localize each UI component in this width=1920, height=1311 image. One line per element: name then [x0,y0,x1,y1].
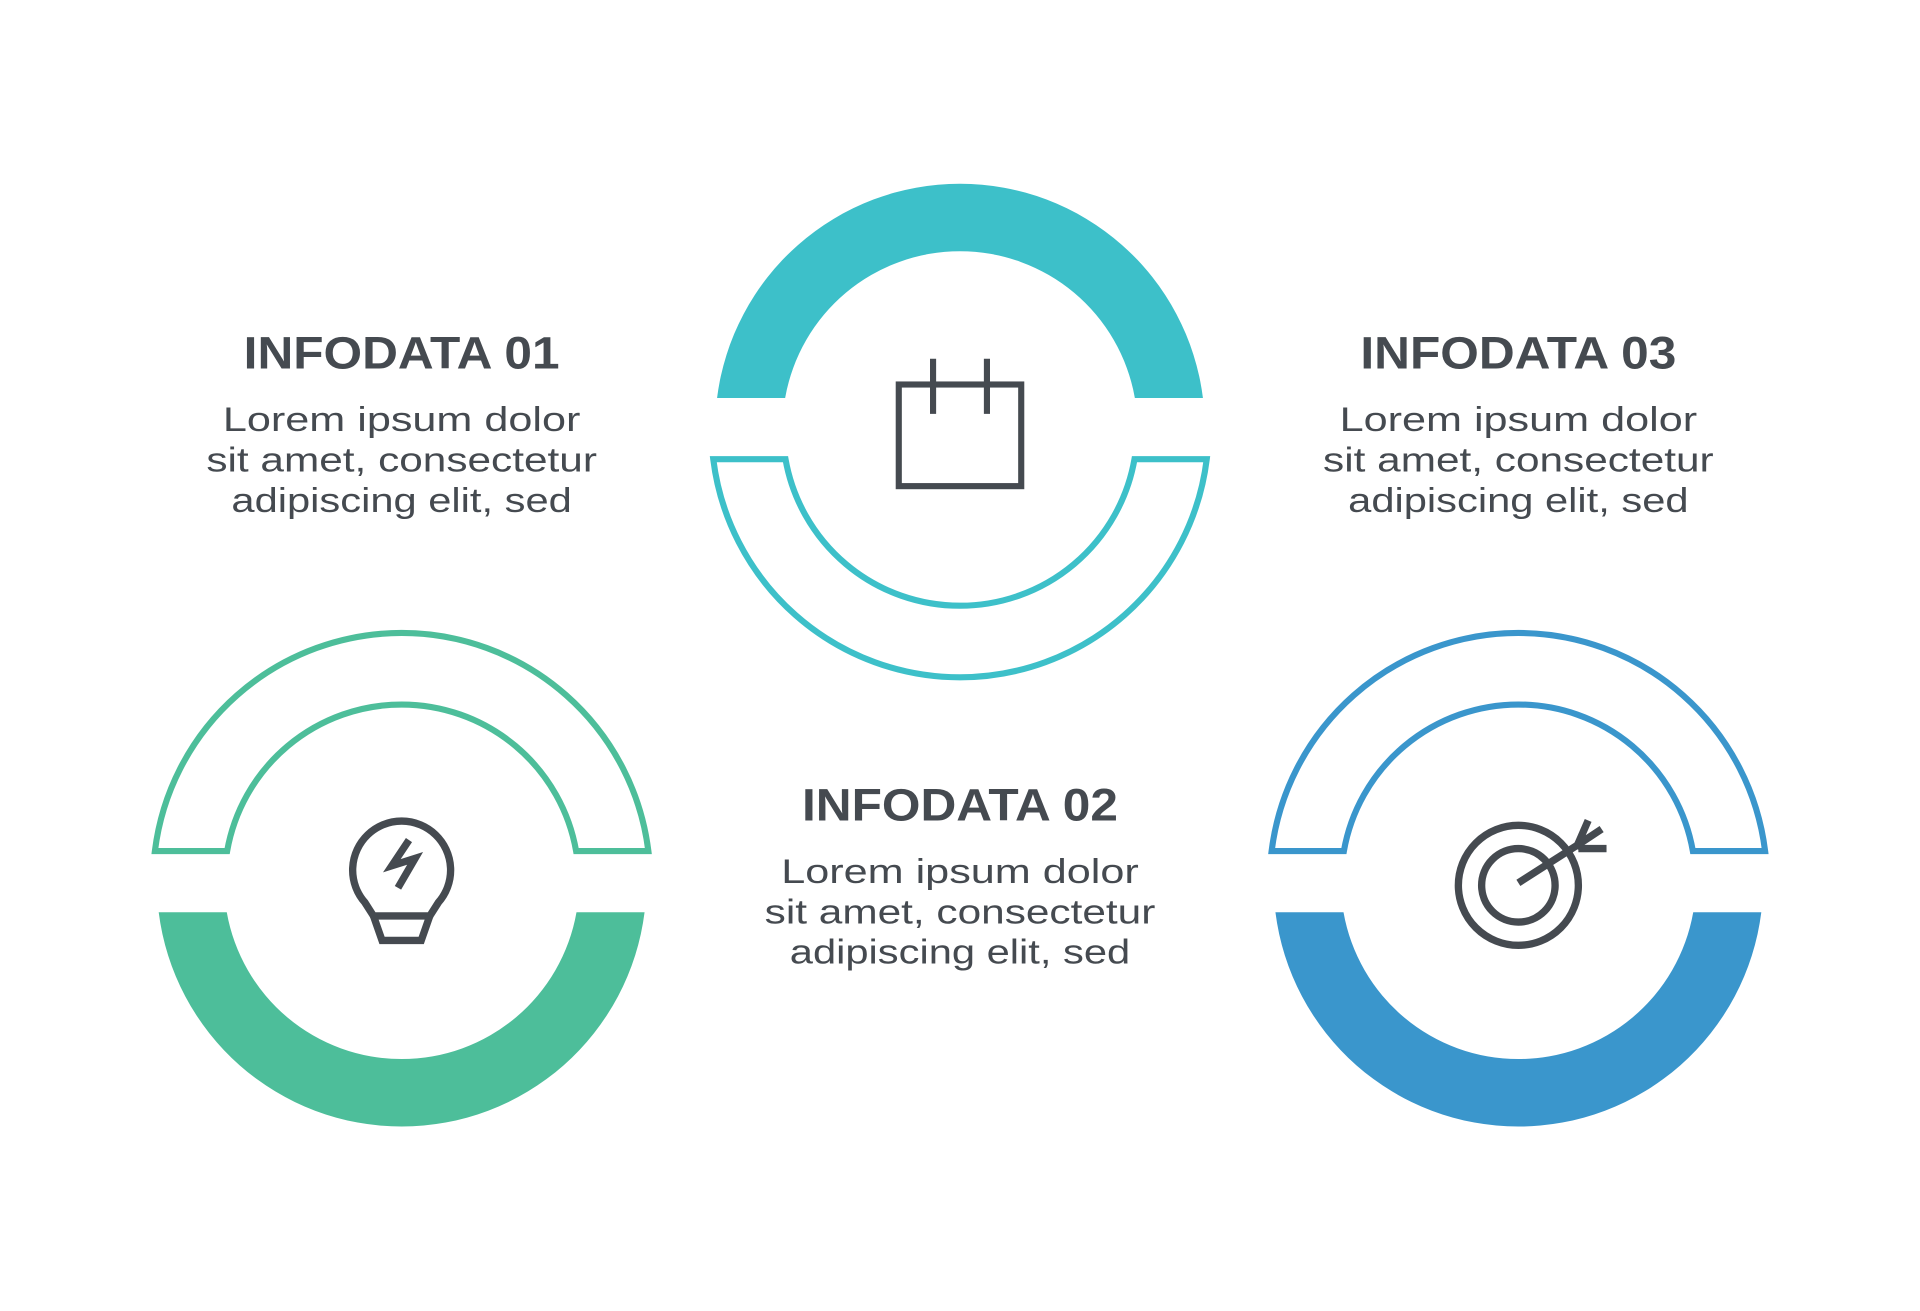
text block: infodata 02: Lorem ipsum dolor [781,853,1139,891]
right bottom filled arc [1275,912,1761,1127]
icon: calendar [899,359,1021,486]
text block: infodata 02: sit amet, consectetur [765,893,1155,931]
panel: center circle [713,184,1207,677]
text block: infodata 03: sit amet, consectetur [1323,441,1714,479]
center bottom outlined arc [713,459,1207,677]
text block: infodata 01: adipiscing elit, sed [231,482,572,520]
icon: light bulb [353,821,451,940]
left bottom filled arc [159,912,645,1127]
panel: right circle [1272,633,1765,1127]
text block: infodata 03: INFODATA 03 [1360,328,1676,379]
left top outlined arc [155,633,648,851]
center top filled arc [717,184,1203,398]
text block: infodata 02: adipiscing elit, sed [790,934,1130,972]
text block: infodata 03: adipiscing elit, sed [1348,482,1689,520]
right top outlined arc [1272,633,1765,851]
text block: infodata 01: sit amet, consectetur [206,441,597,479]
text block: infodata 02: INFODATA 02 [802,779,1118,830]
text block: infodata 01: INFODATA 01 [244,328,560,379]
text block: infodata 02 [765,779,1155,972]
text block: infodata 01: Lorem ipsum dolor [223,401,580,439]
text block: infodata 03: Lorem ipsum dolor [1340,401,1697,439]
panel: left circle [155,633,648,1127]
text block: infodata 03 [1323,328,1714,520]
icon: target [1458,820,1607,945]
text block: infodata 01 [206,328,597,520]
